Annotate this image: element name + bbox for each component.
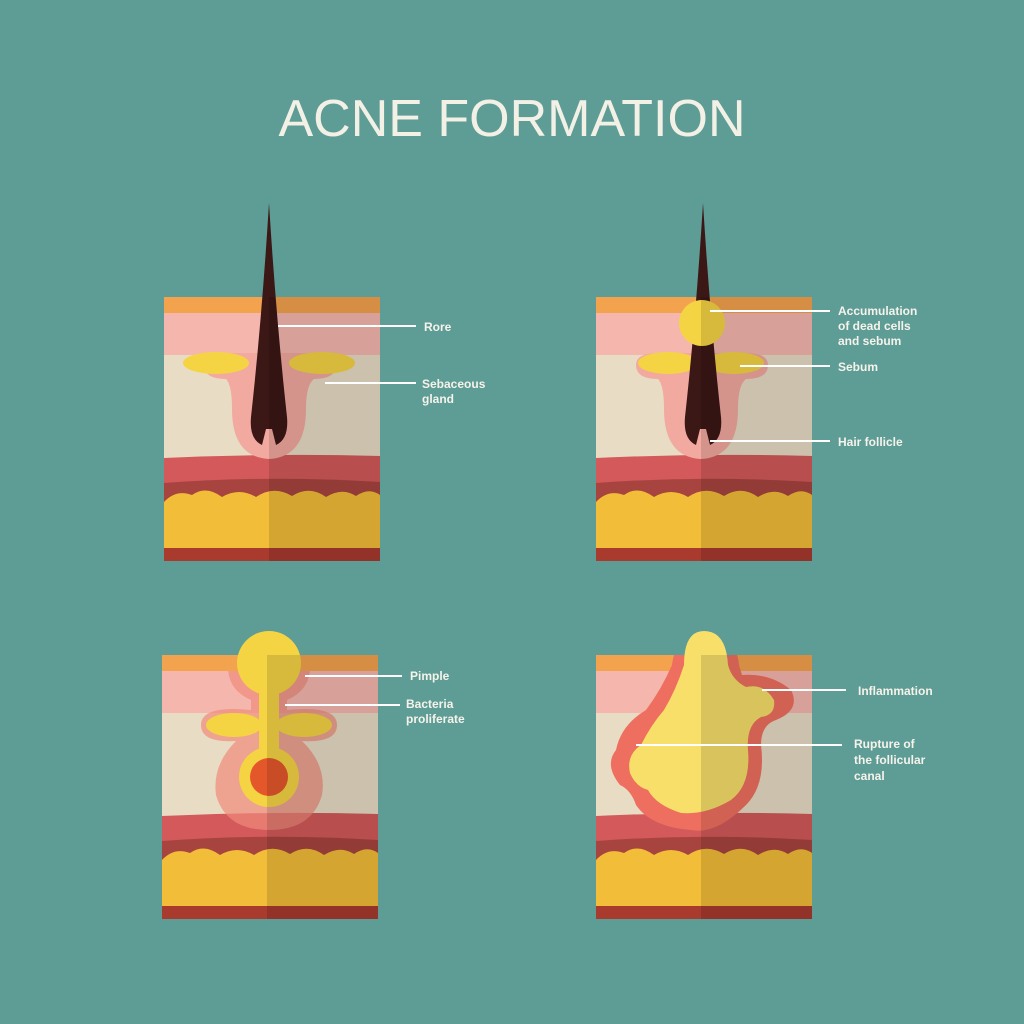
labels panel 4: Inflammation <box>858 684 933 698</box>
panel: healthy skin <box>164 203 380 561</box>
title: ACNE FORMATION <box>278 90 746 148</box>
gland <box>204 353 336 459</box>
labels panel 2: of dead cells <box>838 319 911 333</box>
labels panel 4: canal <box>854 769 885 783</box>
labels panel 2: Hair follicle <box>838 435 903 449</box>
labels panel 2: Sebum <box>838 360 878 374</box>
panel: blocked pore <box>596 203 812 561</box>
labels panel 3: proliferate <box>406 712 465 726</box>
labels panel 2 <box>710 304 917 449</box>
labels panel 1: gland <box>422 392 454 406</box>
labels panel 1 <box>278 320 486 406</box>
labels panel 1: Rore <box>424 320 452 334</box>
labels panel 4 <box>636 684 933 783</box>
labels panel 2: and sebum <box>838 334 901 348</box>
panel: inflammation <box>596 631 812 919</box>
panel: pimple <box>162 625 378 919</box>
labels panel 2: Accumulation <box>838 304 917 318</box>
labels panel 4: Rupture of <box>854 737 916 751</box>
hair <box>251 203 287 445</box>
labels panel 3: Pimple <box>410 669 450 683</box>
labels panel 3: Bacteria <box>406 697 454 711</box>
labels panel 1: Sebaceous <box>422 377 486 391</box>
labels panel 4: the follicular <box>854 753 926 767</box>
labels panel 3 <box>285 669 465 726</box>
